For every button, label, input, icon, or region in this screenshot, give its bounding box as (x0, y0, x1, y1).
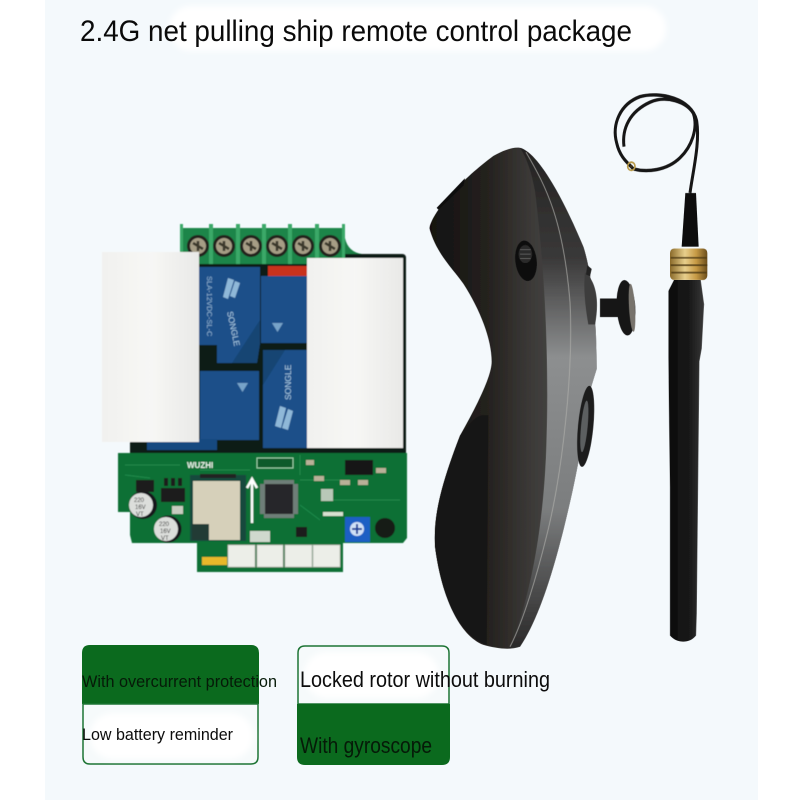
heat sink right (307, 258, 403, 448)
wireless module (190, 474, 246, 541)
label: locked rotor: Locked rotor without burning (300, 667, 550, 692)
red jumper (268, 266, 307, 276)
remote control handset (429, 148, 637, 649)
feature box 1 (82, 645, 277, 764)
cable connector (628, 162, 635, 170)
grip body (429, 148, 597, 649)
white highlight (90, 713, 253, 759)
relays: SONGLE (283, 364, 293, 400)
pin header (257, 458, 293, 468)
capacitors: 16V (160, 529, 171, 535)
title: 2.4G net pulling ship remote control package (80, 15, 632, 48)
arrow (247, 479, 257, 523)
capacitors (129, 491, 182, 542)
title banner (80, 6, 666, 51)
yellow jumper (202, 557, 227, 565)
feature box 2 (297, 646, 550, 765)
capacitors: 16V (135, 505, 146, 511)
label: low battery: Low battery reminder (82, 725, 233, 744)
side button (574, 385, 597, 468)
lower green board (118, 453, 407, 572)
label: overcurrent: With overcurrent protection (82, 672, 277, 691)
black button (375, 518, 395, 538)
capacitors: 220 (134, 498, 145, 504)
small components (136, 460, 386, 542)
capacitors: VT (161, 536, 169, 542)
top trigger (437, 178, 465, 210)
upper board (130, 254, 406, 455)
connector sleeve (682, 193, 699, 247)
relays: SONGLE (225, 310, 242, 347)
driver IC (345, 460, 373, 475)
seam line (510, 152, 571, 647)
WUZHI label: WUZHI (187, 461, 213, 470)
antenna rod (668, 280, 704, 642)
circuit board (102, 224, 407, 572)
capacitors: VT (136, 512, 144, 518)
blue trimmer (345, 517, 370, 542)
antenna (615, 95, 707, 642)
joystick (584, 265, 637, 336)
relays (147, 267, 307, 450)
white connectors (228, 545, 340, 567)
heat sink left (102, 252, 199, 442)
antenna cable loop (615, 95, 698, 193)
microcontroller chip (260, 480, 298, 518)
white highlight (304, 652, 439, 698)
lower grip panel (435, 415, 488, 645)
relays: SLA-12VDC-SL-C (205, 276, 214, 337)
slide switch (513, 239, 539, 283)
terminal block (180, 224, 345, 264)
side panel (509, 148, 597, 648)
circuit traces (125, 455, 400, 520)
label: gyroscope: With gyroscope (300, 733, 432, 758)
gold nut (670, 249, 707, 280)
capacitors: 220 (159, 522, 170, 528)
